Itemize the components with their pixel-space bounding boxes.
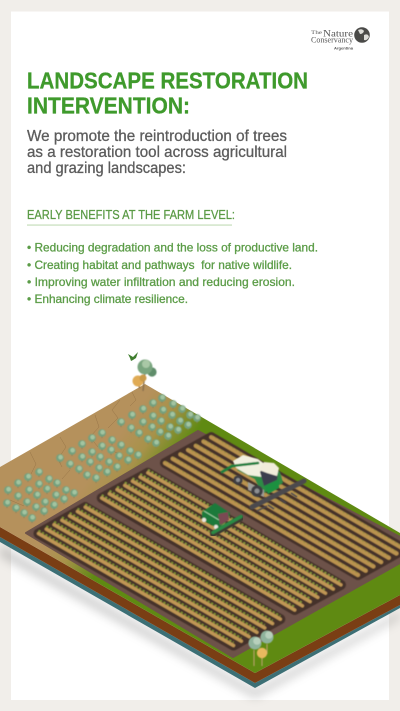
- intro text: and grazing landscapes:: [27, 160, 186, 177]
- logo: The Nature Conservancy Argentina: Argentina: [334, 46, 354, 50]
- title: INTERVENTION:: [27, 92, 190, 118]
- hopper: [233, 455, 266, 477]
- small harvester: [202, 503, 241, 534]
- bird: [128, 352, 138, 361]
- trees at the top corner: [132, 360, 157, 391]
- logo: The Nature Conservancy Argentina: [311, 27, 370, 50]
- benefits list: [27, 240, 318, 306]
- benefits list: • Enhancing climate resilience.: [27, 292, 188, 306]
- title: [27, 68, 308, 118]
- spout: [222, 463, 258, 472]
- crop plot A: [38, 504, 280, 646]
- intro text: [27, 128, 287, 177]
- logo: The Nature Conservancy Argentina: Conservancy: [311, 36, 353, 44]
- crop plot C: [165, 436, 400, 575]
- header bar: [252, 481, 304, 507]
- benefits list: • Creating habitat and pathways for native wildlife.: [27, 258, 292, 272]
- isometric farm illustration: [0, 352, 400, 698]
- trees at the bottom corner: [248, 630, 274, 666]
- logo: The Nature Conservancy Argentina: Nature: [323, 30, 353, 40]
- large harvester: [222, 455, 304, 511]
- benefits list: • Improving water infiltration and reducing erosion.: [27, 275, 295, 289]
- ground shadow: [0, 545, 400, 698]
- body: [237, 462, 283, 494]
- farm road surface: [26, 431, 400, 657]
- benefits list: • Reducing degradation and the loss of productive land.: [27, 240, 318, 254]
- cab: [260, 464, 278, 486]
- wheels: [233, 475, 243, 485]
- land surface: dry soil to green: [0, 384, 400, 673]
- logo: The Nature Conservancy Argentina: The: [311, 30, 323, 36]
- young trees: [3, 394, 201, 523]
- crop plot B: [102, 470, 341, 610]
- land base: side layers: [0, 527, 400, 688]
- soil cracks: [10, 392, 136, 506]
- intro text: We promote the reintroduction of trees: [27, 128, 287, 145]
- title: LANDSCAPE RESTORATION: [27, 68, 308, 94]
- intro text: as a restoration tool across agricultural: [27, 144, 287, 161]
- subheading: early benefits: EARLY BENEFITS AT THE FARM LEVEL:: [27, 208, 235, 222]
